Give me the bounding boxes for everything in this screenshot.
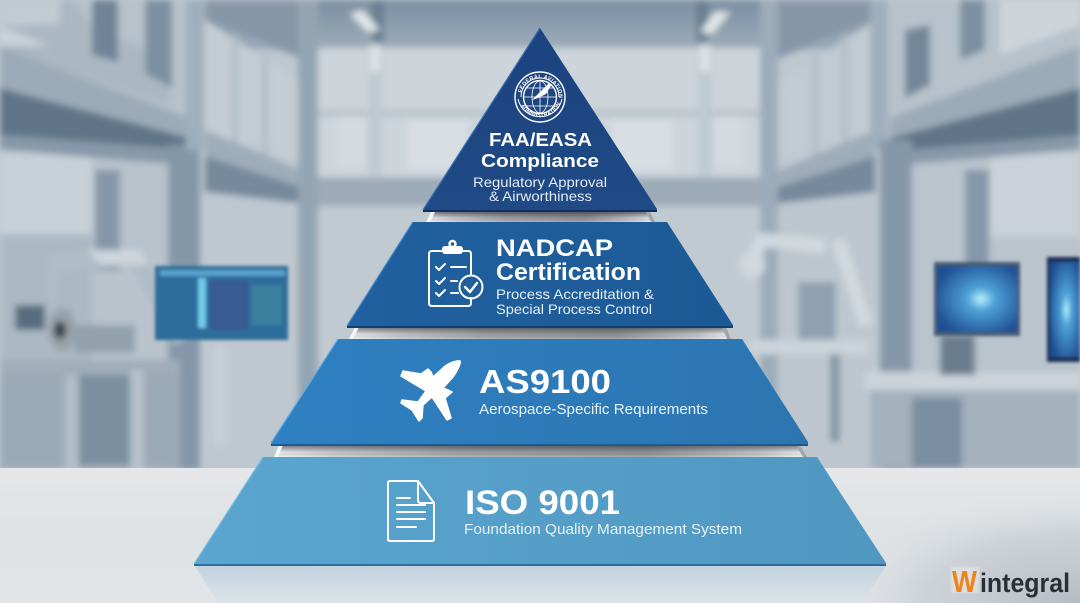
icon: clipboard checklist — [429, 241, 482, 306]
heading: AS9100: AS9100 — [479, 363, 611, 400]
icon: FAA seal — [514, 71, 566, 123]
left monitor screen — [155, 266, 288, 340]
logo: Wintegral: integral — [980, 568, 1070, 598]
left mezzanine — [138, 6, 180, 106]
text: NADCAP description line 1: Process Accreditation & — [496, 286, 655, 302]
heading: Compliance: Compliance — [481, 150, 599, 171]
text: AS9100 description: Aerospace-Specific Requirements — [479, 402, 708, 418]
table surface — [0, 468, 1080, 603]
panel: NADCAP tier — [347, 222, 733, 328]
icon: document — [388, 481, 434, 541]
panel: ISO 9001 tier — [194, 457, 886, 566]
heading: FAA/EASA: FAA/EASA — [489, 129, 592, 150]
heading: ISO 9001: ISO 9001 — [465, 484, 620, 522]
left machine — [94, 262, 186, 346]
robot arm — [798, 282, 836, 342]
left columns — [168, 145, 200, 470]
silver connector middle — [349, 327, 731, 339]
right side wall — [890, 150, 1080, 470]
blurred factory background — [0, 0, 1080, 470]
heading: Certification: Certification — [496, 259, 641, 286]
panel: FAA/EASA tier — [422, 28, 657, 212]
text: FAA description line 2: & Airworthiness — [489, 188, 592, 204]
silver connector bottom — [274, 445, 807, 457]
lights — [372, 0, 384, 42]
right monitor screens — [934, 262, 1020, 336]
ceiling centre — [205, 0, 875, 50]
heading: NADCAP: NADCAP — [496, 235, 613, 262]
centre rail and panes — [318, 110, 762, 116]
silver connector top — [426, 212, 655, 222]
text: NADCAP description line 2: Special Process Control — [496, 301, 652, 317]
right columns — [870, 0, 888, 150]
panel: AS9100 tier — [271, 339, 808, 446]
logo: Wintegral: W — [952, 564, 978, 599]
text: FAA description line 1: Regulatory Approval — [473, 174, 607, 190]
icon: airplane — [401, 361, 460, 421]
left side wall — [0, 150, 190, 470]
right mezzanine — [895, 6, 1074, 110]
logo: Wintegral — [951, 564, 1070, 599]
icon: FAA seal: ADMINISTRATION — [521, 102, 560, 116]
text: ISO description: Foundation Quality Management System — [464, 521, 742, 538]
icon: FAA seal: FEDERAL AVIATION — [518, 74, 563, 98]
right benches — [750, 340, 868, 354]
